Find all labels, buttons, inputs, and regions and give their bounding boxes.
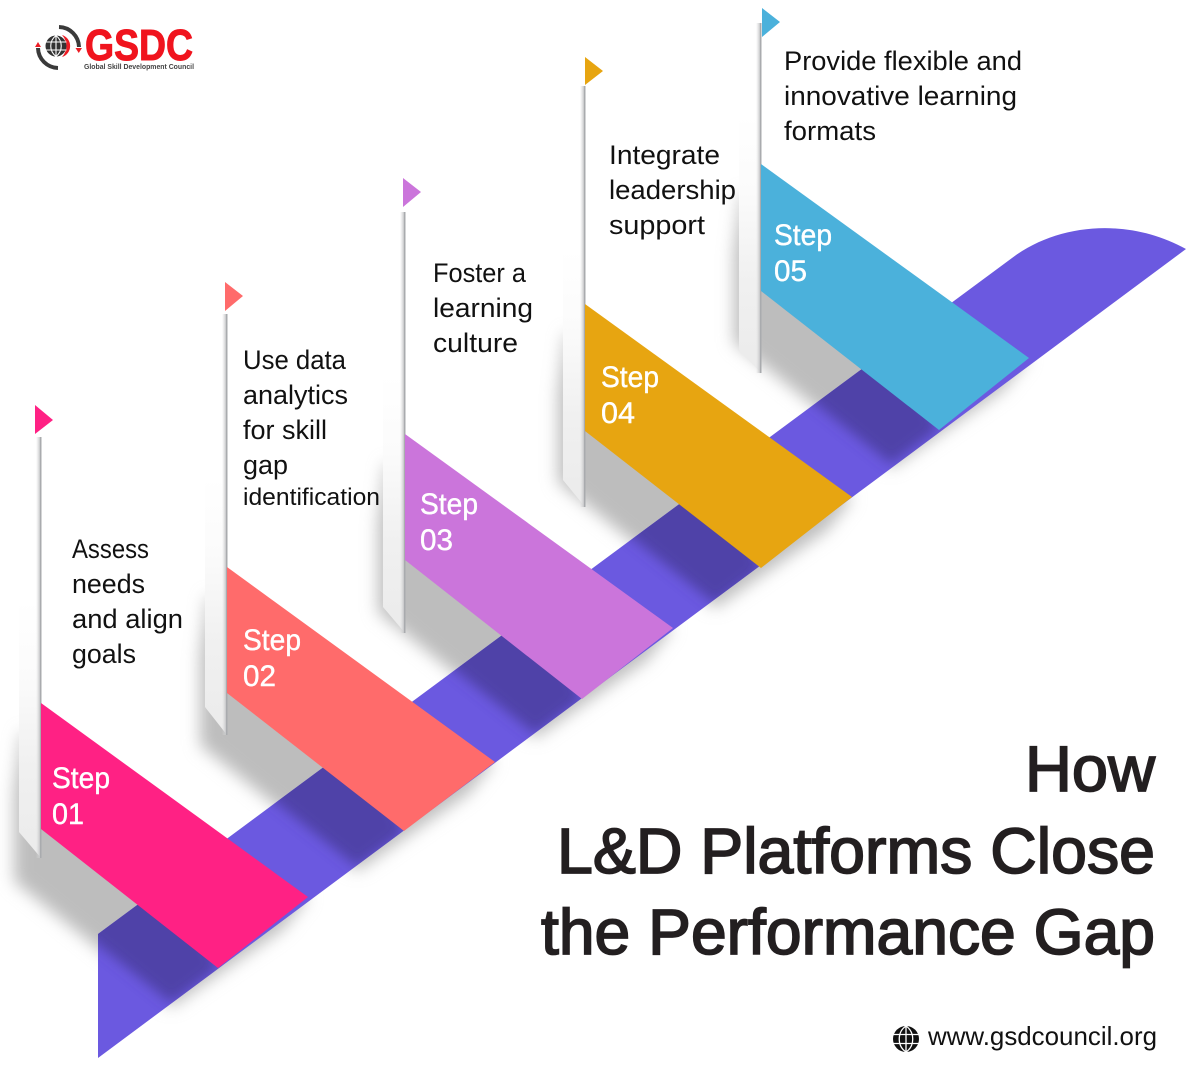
ribbon shadows <box>98 370 941 1006</box>
label 02: 02 <box>243 660 276 693</box>
icon: globe <box>893 1026 919 1052</box>
band 01 <box>41 703 308 968</box>
label 05: 05 <box>774 255 807 288</box>
label 05: Step <box>774 219 832 252</box>
logo: GSDC <box>35 21 194 71</box>
website footer <box>893 1021 1157 1052</box>
logo wordmark: GSDC <box>85 21 193 70</box>
description 03: culture <box>433 328 518 358</box>
band 04 <box>585 304 852 568</box>
flag 01 <box>35 405 53 434</box>
flag 02 <box>225 282 243 311</box>
title: How <box>1025 733 1156 805</box>
label 04: 04 <box>601 397 635 430</box>
description 02: gap <box>243 450 288 480</box>
panel: step 04 <box>563 57 852 568</box>
band 02 <box>227 567 495 831</box>
description 03: learning <box>433 293 533 323</box>
description 01: goals <box>72 639 136 669</box>
description 04: support <box>609 210 706 240</box>
description 04: Integrate <box>609 140 720 170</box>
label 02: Step <box>243 624 301 657</box>
description 02: identification <box>243 484 380 511</box>
description 05: Provide flexible and <box>784 46 1022 76</box>
cast shadows on background <box>14 194 1028 1007</box>
title: the Performance Gap <box>541 896 1155 968</box>
label 04: Step <box>601 361 659 394</box>
description 02: Use data <box>243 345 347 375</box>
logo tagline: Global Skill Development Council <box>84 64 194 71</box>
flag 04 <box>585 57 603 85</box>
purple diagonal ribbon <box>98 228 1186 1058</box>
panel: step 03 <box>383 178 673 699</box>
pole 01 <box>19 437 42 858</box>
pole 04 <box>563 86 586 507</box>
flag 03 <box>403 178 421 207</box>
label 03: Step <box>420 488 478 521</box>
pole 02 <box>205 314 228 735</box>
band 03 <box>405 434 673 699</box>
label 03: 03 <box>420 524 453 557</box>
logo globe icon <box>35 27 82 68</box>
pole 05 <box>739 23 762 373</box>
flag 05 <box>762 8 780 37</box>
panel: step 05 <box>739 8 1029 430</box>
description 01: and align <box>72 604 183 634</box>
label 01: 01 <box>52 798 84 831</box>
description 02: for skill <box>243 415 327 445</box>
description 05: formats <box>784 116 876 146</box>
pole 03 <box>383 212 406 633</box>
description 05: innovative learning <box>784 81 1017 111</box>
website url: www.gsdcouncil.org <box>927 1021 1157 1051</box>
description 01: needs <box>72 569 145 599</box>
title: L&D Platforms Close <box>557 815 1155 887</box>
description 03: Foster a <box>433 258 527 288</box>
description 02: analytics <box>243 380 348 410</box>
panel: step 01 <box>19 405 308 968</box>
band 05 <box>761 164 1029 430</box>
label 01: Step <box>52 762 110 795</box>
panel: step 02 <box>205 282 495 831</box>
description 01: Assess <box>72 534 149 564</box>
description 04: leadership <box>609 175 736 205</box>
